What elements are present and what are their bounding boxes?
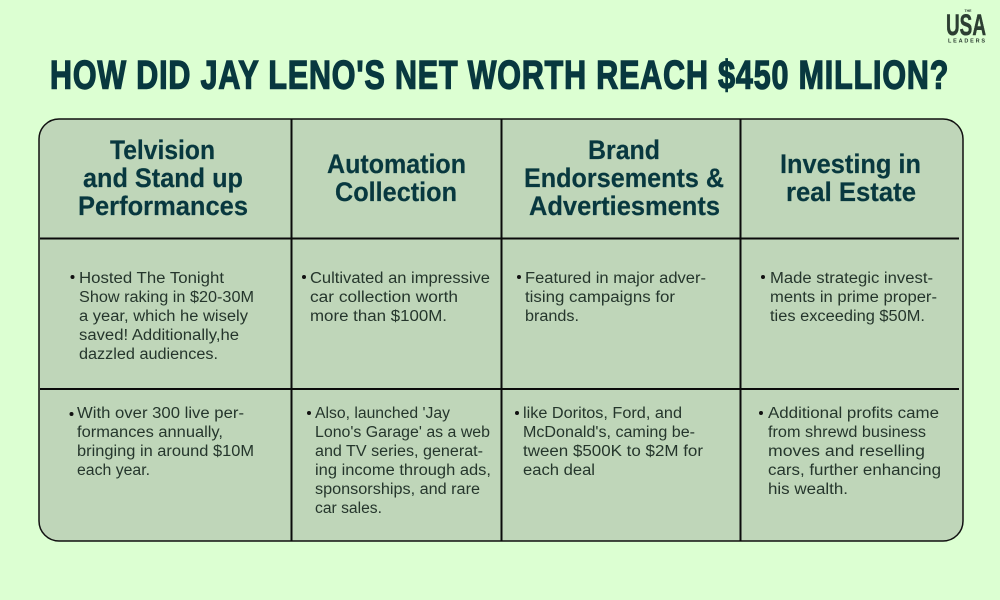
column 3 heading (524, 135, 724, 221)
column 1 heading: Telvision (110, 135, 215, 165)
column 2 row 1 text: car collection worth (310, 289, 458, 306)
column 3 row 2 text: like Doritos, Ford, and (523, 405, 682, 422)
column 1 heading (78, 135, 248, 221)
column 3 row 1 text: Featured in major adver- (525, 270, 706, 287)
column 3 row 1 text (517, 270, 706, 325)
column 2 row 2 text: ing income through ads, (315, 462, 491, 479)
column 1 row 1 text: Show raking in $20-30M (79, 289, 254, 306)
table panel (39, 119, 963, 541)
logo: The USA Leaders: THE (964, 9, 972, 13)
column 1 row 2 text: formances annually, (77, 424, 223, 441)
column 2 row 2 text: sponsorships, and rare (315, 481, 480, 498)
column 1 heading: and Stand up (83, 163, 243, 193)
column 2 heading (327, 149, 466, 207)
column 1 row 1 text: Hosted The Tonight (79, 270, 225, 287)
column 1 row 1 text: dazzled audiences. (79, 346, 218, 363)
column 2 heading: Automation (327, 149, 466, 179)
column 3 row 2 text: tween $500K to $2M for (523, 443, 703, 460)
column 2 row 2 text: Lono's Garage' as a web (315, 424, 490, 441)
column 3 heading: Brand (588, 135, 660, 165)
column 2 row 1 text: more than $100M. (310, 308, 447, 325)
column 4 row 1 text (761, 270, 937, 325)
column 3 row 2 text: each deal (523, 462, 595, 479)
column 4 row 2 text: cars, further enhancing (768, 462, 941, 479)
column 2 row 2 text (307, 405, 491, 517)
column 3 row 2 text (515, 405, 703, 479)
column 4 row 2 text: moves and reselling (768, 443, 925, 460)
column 4 row 2 text: from shrewd business (768, 424, 926, 441)
title: HOW DID JAY LENO'S NET WORTH REACH $450 MILLION? (50, 52, 948, 98)
column 4 heading: real Estate (786, 177, 916, 207)
column 3 row 2 text: McDonald's, caming be- (523, 424, 695, 441)
column 1 heading: Performances (78, 191, 248, 221)
column 4 row 2 text (759, 405, 941, 498)
logo: The USA Leaders: LEADERS (948, 38, 985, 44)
column 2 row 2 text: car sales. (315, 500, 382, 517)
column 4 row 1 text: ties exceeding $50M. (770, 308, 925, 325)
column 2 row 2 text: Also, launched 'Jay (315, 405, 450, 422)
column 3 heading: Endorsements & (524, 163, 724, 193)
column 1 row 2 text: each year. (77, 462, 150, 479)
column 3 row 1 text: brands. (525, 308, 579, 325)
column 1 row 1 text (70, 270, 254, 363)
column 1 row 1 text: a year, which he wisely (79, 308, 248, 325)
column 2 heading: Collection (335, 177, 457, 207)
column 2 row 1 text: Cultivated an impressive (310, 270, 490, 287)
column 3 row 1 text: tising campaigns for (525, 289, 675, 306)
column 4 row 1 text: Made strategic invest- (770, 270, 933, 287)
column 2 row 2 text: and TV series, generat- (315, 443, 483, 460)
column 3 heading: Advertiesments (529, 191, 720, 221)
column 1 row 2 text: With over 300 live per- (77, 405, 244, 422)
column 4 heading: Investing in (780, 149, 921, 179)
column 2 row 1 text (302, 270, 490, 325)
column 4 heading (780, 149, 921, 207)
column 1 row 2 text (70, 405, 254, 479)
column 4 row 2 text: his wealth. (768, 481, 848, 498)
column 4 row 2 text: Additional profits came (768, 405, 939, 422)
column 1 row 2 text: bringing in around $10M (77, 443, 254, 460)
column 1 row 1 text: saved! Additionally,he (79, 327, 239, 344)
column 4 row 1 text: ments in prime proper- (770, 289, 937, 306)
